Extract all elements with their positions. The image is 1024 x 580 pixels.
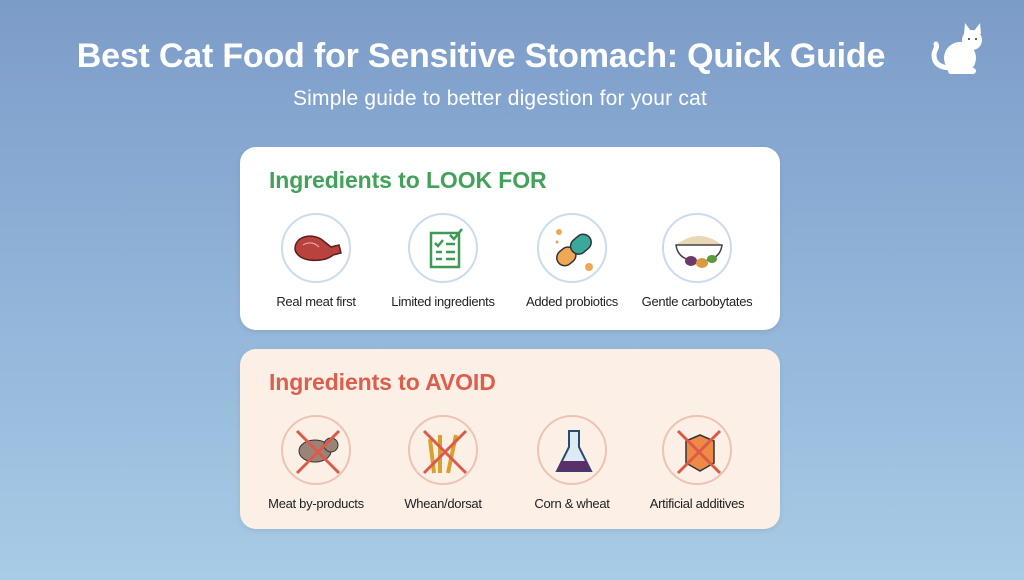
item: probiotics: Added probiotics <box>526 294 618 309</box>
item: artificial additives: Artificial additives <box>650 496 744 511</box>
icon: white cat <box>932 23 982 74</box>
item: limited ingredients <box>391 213 495 309</box>
heading: look for: Ingredients to LOOK FOR <box>269 167 547 193</box>
panel: avoid <box>240 349 780 529</box>
subtitle: Simple guide to better digestion for your cat <box>293 87 707 110</box>
item: gentle carbs <box>642 213 752 309</box>
item: corn & wheat: Corn & wheat <box>534 496 610 511</box>
item: gentle carbs: Gentle carbobytates <box>642 294 752 309</box>
item: meat by-products: Meat by-products <box>268 496 364 511</box>
heading: avoid: Ingredients to AVOID <box>269 369 496 395</box>
item: whean/dorsat: Whean/dorsat <box>404 496 482 511</box>
item: artificial additives <box>650 415 744 511</box>
item: probiotics <box>526 213 618 309</box>
panel: look for <box>240 147 780 330</box>
item: meat by-products <box>268 415 364 511</box>
item: real meat: Real meat first <box>276 294 356 309</box>
item: real meat <box>276 213 356 309</box>
item: limited ingredients: Limited ingredients <box>391 294 495 309</box>
item: corn & wheat <box>534 415 610 511</box>
title: Best Cat Food for Sensitive Stomach: Quick Guide <box>77 37 885 75</box>
item: whean/dorsat <box>404 415 482 511</box>
